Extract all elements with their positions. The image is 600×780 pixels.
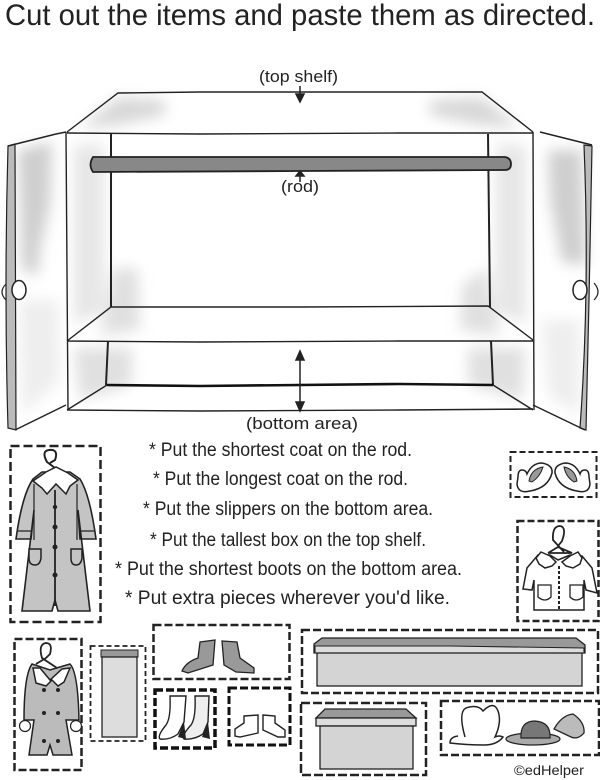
instructions: * Put extra pieces wherever you'd like. bbox=[125, 588, 450, 609]
cutout: longest coat bbox=[10, 446, 100, 622]
copyright: ©edHelper bbox=[514, 763, 585, 778]
instructions bbox=[115, 440, 462, 609]
label: top shelf: (top shelf) bbox=[259, 67, 338, 86]
rod bbox=[90, 157, 511, 172]
cutout: tallest box bbox=[90, 646, 146, 741]
closet outline bbox=[67, 92, 533, 134]
cutout: hats bbox=[441, 701, 599, 755]
cutout: long box bbox=[302, 630, 598, 693]
cutout: high heel boots bbox=[155, 690, 215, 748]
arrow: top shelf bbox=[296, 86, 304, 102]
cutout: gray boots bbox=[154, 625, 290, 679]
cutout: short boots bbox=[229, 688, 290, 745]
cutout: fur collar coat bbox=[14, 639, 82, 770]
label: rod: (rod) bbox=[281, 177, 319, 196]
instructions: * Put the shortest coat on the rod. bbox=[149, 440, 412, 461]
cutout: short box bbox=[301, 703, 426, 775]
instructions: * Put the longest coat on the rod. bbox=[153, 469, 408, 490]
closet illustration bbox=[2, 86, 598, 430]
instructions: * Put the slippers on the bottom area. bbox=[143, 499, 433, 520]
arrow: bottom area bbox=[296, 351, 304, 411]
left door bbox=[2, 132, 66, 430]
instructions: * Put the tallest box on the top shelf. bbox=[150, 530, 426, 551]
cutout: slippers bbox=[510, 452, 596, 497]
cutout: shortest coat bbox=[518, 521, 598, 621]
closet shading bbox=[74, 97, 526, 400]
label: bottom area: (bottom area) bbox=[246, 414, 358, 433]
instructions: * Put the shortest boots on the bottom area. bbox=[115, 559, 462, 580]
arrow: rod bbox=[296, 171, 304, 182]
right door bbox=[533, 132, 598, 430]
